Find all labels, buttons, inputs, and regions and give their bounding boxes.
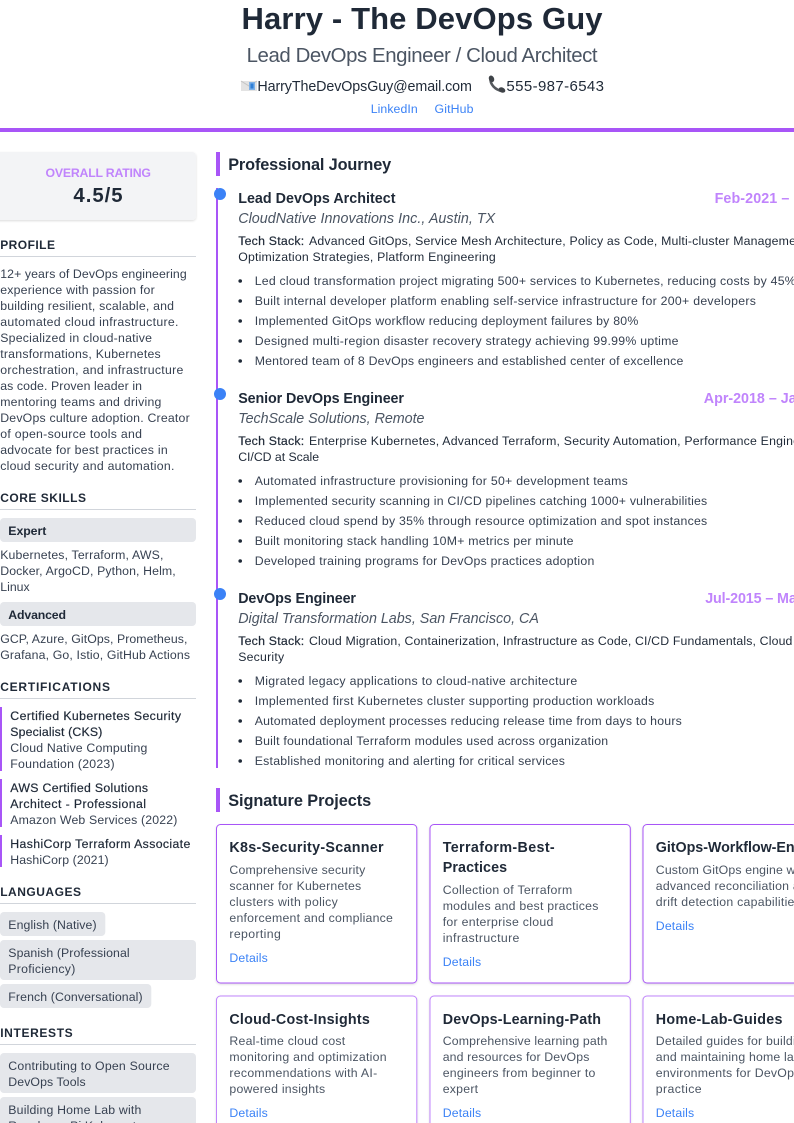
panel: core skills: [0, 491, 196, 662]
project card: devops-learning-path: engineers from beginner to: [443, 1066, 596, 1080]
job: devops engineer: Established monitoring and alerting for critical services: [255, 754, 565, 768]
panel: core skills: Advanced: [8, 608, 66, 622]
panel: profile: DevOps culture adoption. Creator: [0, 411, 190, 425]
job: senior devops engineer: Built monitoring stack handling 10M+ metrics per minute: [255, 534, 574, 548]
contact row: [241, 75, 604, 95]
panel: certifications: HashiCorp Terraform Associate: [10, 837, 190, 851]
panel: certifications: Certified Kubernetes Security: [10, 709, 182, 723]
project card: k8s-security-scanner: Comprehensive security: [229, 863, 366, 877]
panel: languages: [0, 885, 196, 1008]
project card: k8s-security-scanner: [216, 824, 417, 983]
panel: core skills: Docker, ArgoCD, Python, Helm,: [0, 564, 176, 578]
panel: profile: orchestration, and infrastructure: [0, 363, 184, 377]
panel: profile: of open-source tools and: [0, 427, 142, 441]
job: senior devops engineer: [214, 388, 794, 568]
job: senior devops engineer: Reduced cloud spend by 35% through resource optimization and spot instances: [255, 514, 707, 528]
project card: home-lab-guides: Home-Lab-Guides: [656, 1012, 782, 1028]
panel: certifications: Foundation (2023): [10, 757, 115, 771]
project card: k8s-security-scanner: reporting: [229, 927, 281, 941]
section heading: signature projects: [216, 788, 371, 812]
panel: profile: building resilient, scalable, and: [0, 299, 174, 313]
project card: k8s-security-scanner: Details: [229, 951, 268, 965]
panel: interests: Contributing to Open Source: [8, 1059, 170, 1073]
job: lead devops architect: Led cloud transformation project migrating 500+ services to Kubernetes, reducing costs by 45%: [255, 274, 794, 288]
project card: gitops-workflow-engine: [643, 824, 794, 983]
section heading: professional journey: [216, 152, 391, 176]
panel: profile: automated cloud infrastructure.: [0, 315, 178, 329]
project card: k8s-security-scanner: K8s-Security-Scanner: [229, 840, 384, 856]
panel: profile: experience with passion for: [0, 283, 155, 297]
job: devops engineer: [214, 588, 794, 768]
panel: certifications: Cloud Native Computing: [10, 741, 147, 755]
project card: devops-learning-path: and resources for DevOps: [443, 1050, 589, 1064]
project card: k8s-security-scanner: clusters with policy: [229, 895, 339, 909]
project card: terraform-best-practices: Collection of Terraform: [443, 883, 572, 897]
panel: core skills: Expert: [8, 524, 46, 538]
panel: core skills: Kubernetes, Terraform, AWS,: [0, 548, 163, 562]
panel: profile: [0, 238, 196, 473]
project card: cloud-cost-insights: Details: [229, 1106, 268, 1120]
panel: languages: French (Conversational): [8, 990, 143, 1004]
project card: k8s-security-scanner: scanner for Kubernetes: [229, 879, 361, 893]
panel: languages: Spanish (Professional: [8, 946, 130, 960]
panel: profile: transformations, Kubernetes: [0, 347, 161, 361]
job: devops engineer: Migrated legacy applications to cloud-native architecture: [255, 674, 577, 688]
project card: cloud-cost-insights: recommendations with AI-: [229, 1066, 377, 1080]
panel: professional journey: [214, 152, 794, 768]
job: senior devops engineer: Senior DevOps Engineer: [238, 391, 404, 407]
job: devops engineer: DevOps Engineer: [238, 591, 356, 607]
panel: certifications: HashiCorp (2021): [10, 853, 109, 867]
job: lead devops architect: Implemented GitOps workflow reducing deployment failures by 80%: [255, 314, 638, 328]
project card: home-lab-guides: practice: [656, 1082, 702, 1096]
job: lead devops architect: Lead DevOps Architect: [238, 191, 396, 207]
panel: profile: as code. Proven leader in: [0, 379, 142, 393]
timeline line: [216, 188, 218, 768]
panel: certifications: CERTIFICATIONS: [0, 680, 110, 694]
job: lead devops architect: CloudNative Innovations Inc., Austin, TX: [238, 211, 496, 227]
job: senior devops engineer: Implemented security scanning in CI/CD pipelines catching 1000+ vulnerabilities: [255, 494, 707, 508]
job: lead devops architect: Tech Stack:: [238, 234, 304, 248]
profile links: GitHub: [434, 102, 474, 116]
project card: gitops-workflow-engine: Details: [656, 919, 694, 933]
panel: profile: cloud security and automation.: [0, 459, 174, 473]
overall rating card: [0, 152, 196, 220]
project card: terraform-best-practices: infrastructure: [443, 931, 520, 945]
job: senior devops engineer: Tech Stack:: [238, 434, 304, 448]
sidebar: [0, 152, 196, 1123]
panel: certifications: Amazon Web Services (2022): [10, 813, 177, 827]
section heading: professional journey: Professional Journey: [228, 156, 391, 174]
project card: devops-learning-path: DevOps-Learning-Path: [443, 1012, 601, 1028]
project card: cloud-cost-insights: [216, 996, 417, 1123]
panel: certifications: Specialist (CKS): [10, 725, 102, 739]
panel: signature projects: [216, 788, 794, 1123]
panel: interests: Building Home Lab with: [8, 1103, 141, 1117]
email address: HarryTheDevOpsGuy@email.com: [257, 79, 472, 95]
panel: profile: PROFILE: [0, 238, 55, 252]
job: devops engineer: Cloud Migration, Containerization, Infrastructure as Code, CI/CD Fundamentals, Cloud: [309, 634, 793, 648]
job: senior devops engineer: Developed training programs for DevOps practices adoption: [255, 554, 594, 568]
panel: languages: English (Native): [8, 918, 97, 932]
job: devops engineer: Tech Stack:: [238, 634, 304, 648]
job subtitle: Lead DevOps Engineer / Cloud Architect: [247, 45, 598, 67]
panel: profile: advocate for best practices in: [0, 443, 168, 457]
job: senior devops engineer: Automated infrastructure provisioning for 50+ development teams: [255, 474, 628, 488]
panel: interests: INTERESTS: [0, 1026, 73, 1040]
header: [241, 1, 604, 116]
panel: languages: Proficiency): [8, 962, 75, 976]
panel: certifications: AWS Certified Solutions: [10, 781, 148, 795]
panel: core skills: CORE SKILLS: [0, 491, 86, 505]
project card: terraform-best-practices: for enterprise cloud: [443, 915, 553, 929]
panel: core skills: GCP, Azure, GitOps, Prometheus,: [0, 632, 187, 646]
job: lead devops architect: Optimization Strategies, Platform Engineering: [238, 250, 496, 264]
job: devops engineer: Digital Transformation Labs, San Francisco, CA: [238, 611, 539, 627]
project card: home-lab-guides: Details: [656, 1106, 694, 1120]
project card: k8s-security-scanner: enforcement and compliance: [229, 911, 393, 925]
job: devops engineer: Built foundational Terraform modules used across organization: [255, 734, 608, 748]
job: lead devops architect: Mentored team of 8 DevOps engineers and established center of excellence: [255, 354, 683, 368]
project card: devops-learning-path: Comprehensive learning path: [443, 1034, 607, 1048]
profile links: LinkedIn: [371, 102, 418, 116]
job: lead devops architect: Designed multi-region disaster recovery strategy achieving 99.99% uptime: [255, 334, 679, 348]
profile links: [371, 102, 474, 116]
name title: Harry - The DevOps Guy: [242, 1, 603, 36]
project card: home-lab-guides: [643, 996, 794, 1123]
job: senior devops engineer: TechScale Solutions, Remote: [238, 411, 425, 427]
panel: interests: [0, 1026, 196, 1123]
project card: cloud-cost-insights: monitoring and optimization: [229, 1050, 387, 1064]
section heading: signature projects: Signature Projects: [228, 792, 371, 810]
job: devops engineer: Implemented first Kubernetes cluster supporting production workloads: [255, 694, 654, 708]
panel: profile: Specialized in cloud-native: [0, 331, 152, 345]
panel: profile: 12+ years of DevOps engineering: [0, 267, 187, 281]
overall rating card: OVERALL RATING: [46, 166, 151, 180]
panel: interests: DevOps Tools: [8, 1075, 86, 1089]
panel: core skills: Grafana, Go, Istio, GitHub Actions: [0, 648, 190, 662]
project card: cloud-cost-insights: Real-time cloud cost: [229, 1034, 346, 1048]
job: lead devops architect: [214, 188, 794, 368]
panel: profile: mentoring teams and driving: [0, 395, 162, 409]
project card: terraform-best-practices: [430, 824, 630, 983]
job: lead devops architect: Built internal developer platform enabling self-service infrastructure for 200+ developers: [255, 294, 756, 308]
project card: cloud-cost-insights: powered insights: [229, 1082, 325, 1096]
header divider: [0, 128, 794, 132]
job: devops engineer: Automated deployment processes reducing release time from days to hours: [255, 714, 682, 728]
project card: terraform-best-practices: Terraform-Best-: [443, 840, 555, 856]
project card: terraform-best-practices: Details: [443, 955, 481, 969]
panel: core skills: Linux: [0, 580, 31, 594]
icon: phone: [488, 75, 506, 94]
project card: devops-learning-path: [430, 996, 630, 1123]
overall rating card: 4.5/5: [73, 185, 123, 207]
icon: email: [241, 81, 257, 91]
project card: devops-learning-path: Details: [443, 1106, 481, 1120]
project card: devops-learning-path: expert: [443, 1082, 479, 1096]
job: senior devops engineer: CI/CD at Scale: [238, 450, 319, 464]
project card: terraform-best-practices: Practices: [443, 860, 507, 876]
phone number: 555-987-6543: [506, 78, 604, 95]
job: devops engineer: Security: [238, 650, 285, 664]
panel: certifications: Architect - Professional: [10, 797, 146, 811]
project card: terraform-best-practices: modules and best practices: [443, 899, 598, 913]
panel: languages: LANGUAGES: [0, 885, 81, 899]
panel: certifications: [0, 680, 196, 867]
project card: cloud-cost-insights: Cloud-Cost-Insights: [229, 1012, 370, 1028]
